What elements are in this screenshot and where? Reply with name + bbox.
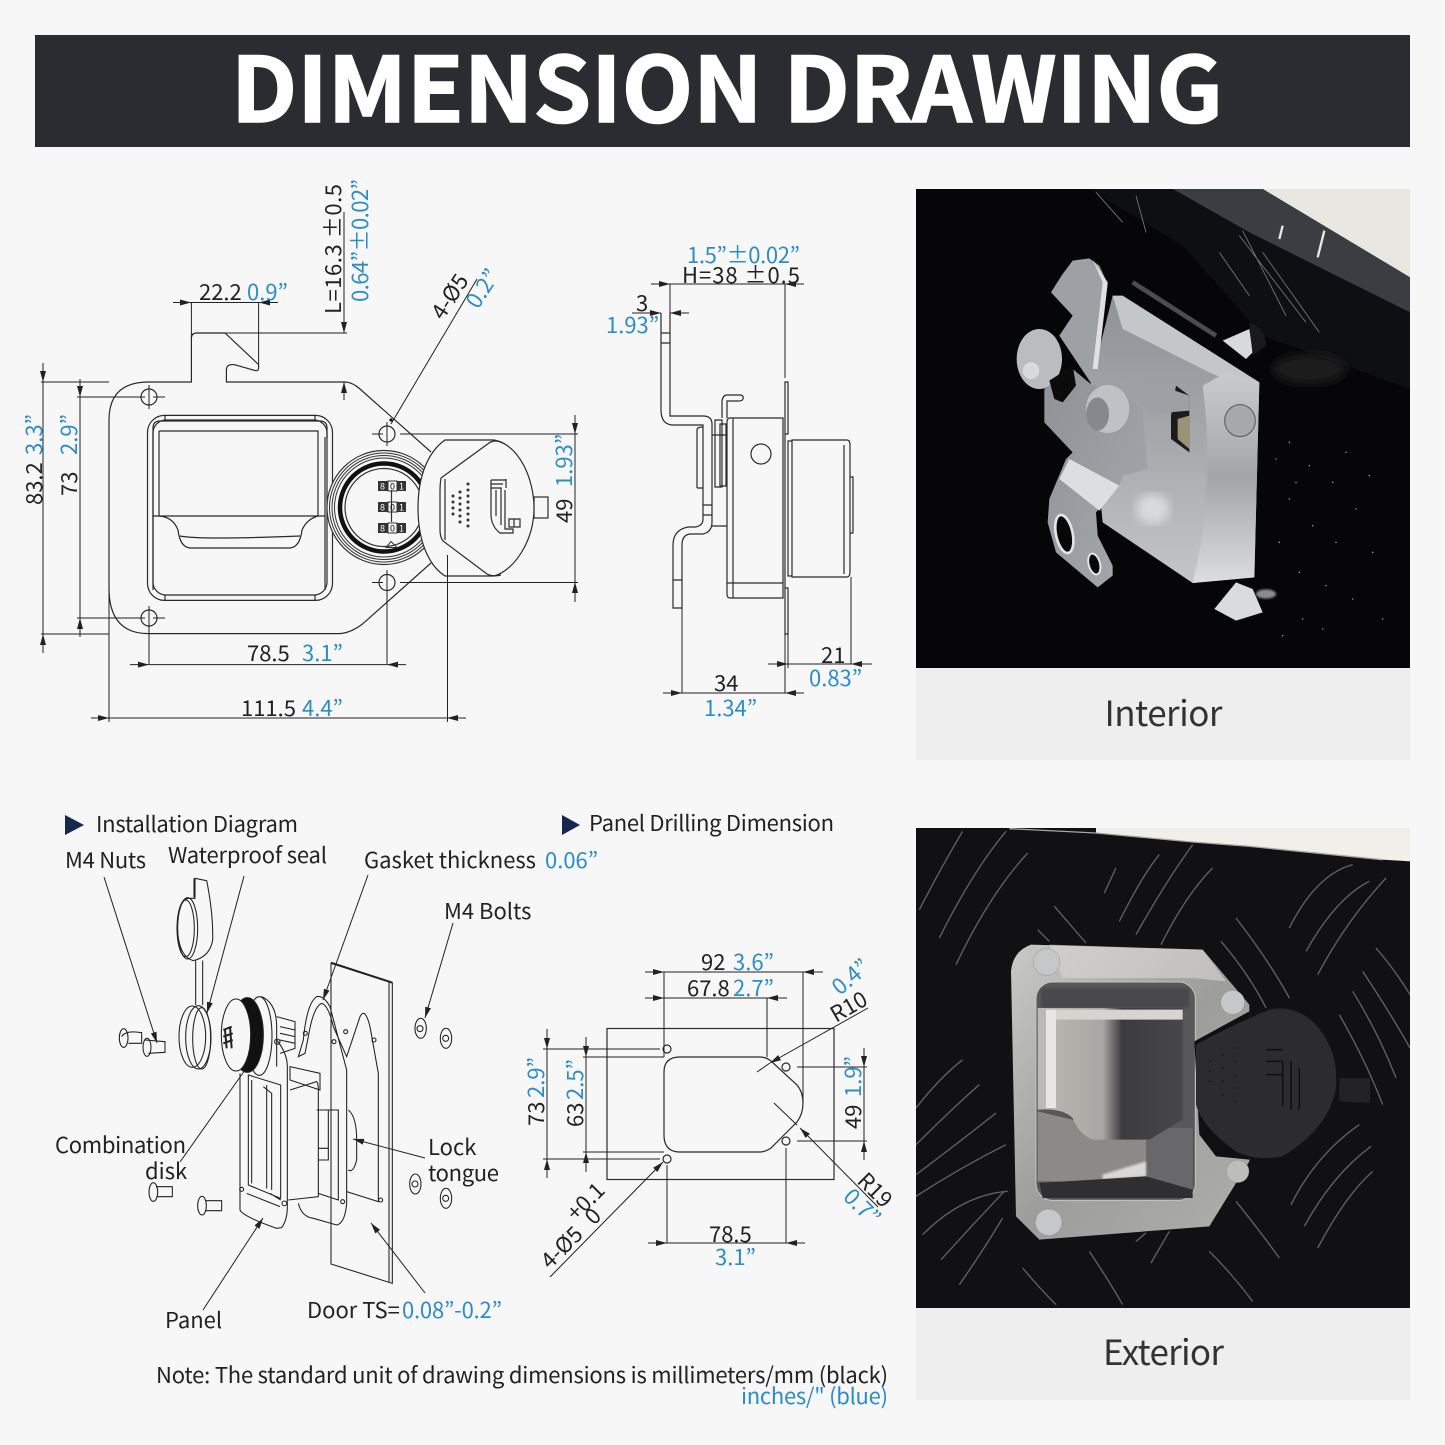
- front view dimension labels: L=16.3 ±0.5: [316, 184, 348, 314]
- exploded view drawing: [119, 878, 452, 1283]
- photo: exterior view: [916, 828, 1410, 1308]
- front view dimension labels: 3.1”: [302, 636, 343, 668]
- callout labels: Gasket thickness: [364, 843, 536, 875]
- installation diagram: [55, 807, 598, 1335]
- combination dial: [327, 450, 441, 564]
- side dimension labels: 1.5”±0.02”: [687, 238, 800, 270]
- lock side outline: [661, 313, 853, 634]
- drilling template: [607, 1028, 834, 1180]
- front view dimension labels: 0.2”: [457, 262, 506, 314]
- drilling heading: Panel Drilling Dimension: [589, 806, 834, 838]
- callout labels: Waterproof seal: [168, 838, 327, 870]
- panel drilling dimension: [519, 806, 901, 1277]
- front view technical drawing: [17, 179, 579, 723]
- drilling dimension labels: 73: [519, 1102, 551, 1126]
- leader lines: [104, 875, 453, 1310]
- exterior caption: Exterior: [1103, 1325, 1224, 1376]
- interior caption: Interior: [1104, 686, 1223, 737]
- drilling dimension labels: 1.9”: [836, 1056, 868, 1097]
- drilling dimension labels: 63: [558, 1103, 590, 1127]
- combination dial: 1: [399, 480, 404, 492]
- combination dial: 8: [380, 500, 385, 514]
- drilling dimension labels: R10: [824, 982, 873, 1029]
- note: Note: The standard unit of drawing dimensions is millimeters/mm (black): [156, 1358, 888, 1390]
- callout labels: tongue: [428, 1156, 499, 1188]
- combination dial: 0: [390, 522, 395, 534]
- front view dimension labels: 3.3”: [17, 414, 49, 455]
- front view dimension labels: 22.2: [199, 275, 242, 307]
- drilling dimension labels: 0.7”: [837, 1180, 889, 1232]
- photo: interior view: [916, 189, 1410, 669]
- drilling dimension labels: 2.9”: [519, 1057, 551, 1098]
- front view dimension labels: 78.5: [247, 636, 290, 668]
- side dimension labels: 21: [821, 638, 845, 670]
- combination dial: 0: [390, 480, 395, 492]
- title banner: DIMENSION DRAWING: [231, 18, 1223, 148]
- front view dimension labels: 83.2: [17, 462, 49, 505]
- side dimension labels: 34: [714, 666, 738, 698]
- callout labels: Lock: [428, 1130, 476, 1162]
- drilling dimension labels: 2.5”: [558, 1059, 590, 1100]
- front view dimension labels: 73: [52, 472, 84, 496]
- front view dimension labels: 2.9”: [52, 414, 84, 455]
- drilling dimension labels: 0: [576, 1200, 608, 1231]
- callout labels: [55, 838, 598, 1335]
- side dimension labels: 0.83”: [809, 661, 862, 693]
- combination dial: 8: [380, 522, 385, 534]
- drilling dimension labels: [519, 945, 901, 1275]
- drilling dimension labels: 3.6”: [733, 945, 774, 977]
- side dimension labels: 1.93”: [606, 308, 659, 340]
- callout labels: disk: [145, 1154, 187, 1186]
- side dimension labels: [606, 238, 862, 723]
- side dimension labels: 3: [636, 286, 648, 318]
- callout labels: M4 Bolts: [444, 894, 531, 926]
- side dimension lines: [632, 284, 872, 693]
- callout labels: Combination: [55, 1128, 186, 1160]
- drilling dimension labels: 67.8: [687, 971, 730, 1003]
- side dimension labels: 1.34”: [704, 691, 757, 723]
- combination dial: 0: [390, 500, 395, 514]
- callout labels: M4 Nuts: [65, 843, 146, 875]
- waterproof cap: [418, 440, 548, 576]
- lock front outline: [109, 333, 431, 634]
- interior caption: [916, 668, 1410, 760]
- note: [156, 1358, 888, 1411]
- installation heading: Installation Diagram: [96, 807, 298, 839]
- front view dimension labels: 4.4”: [302, 691, 343, 723]
- side dimension labels: H=38 ±0.5: [682, 258, 800, 290]
- front view dimension labels: 0.64”±0.02”: [343, 179, 375, 302]
- front view dimension labels: 0.9”: [247, 275, 288, 307]
- drilling dimension labels: 4-Ø5: [532, 1218, 589, 1275]
- combination dial: 8: [380, 480, 385, 492]
- combination dial: 1: [399, 500, 404, 514]
- drilling dimension lines: [543, 972, 878, 1277]
- combination dial: 1: [399, 522, 404, 534]
- exterior caption: [916, 1308, 1410, 1400]
- drilling dimension labels: R19: [851, 1164, 901, 1214]
- drilling dimension labels: +0.1: [558, 1174, 611, 1227]
- front view dimension labels: 49: [547, 499, 579, 523]
- drilling dimension labels: 2.7”: [733, 971, 774, 1003]
- drilling dimension labels: 49: [836, 1105, 868, 1129]
- callout labels: Panel: [165, 1303, 222, 1335]
- front view dimension labels: 111.5: [241, 691, 296, 723]
- drilling dimension labels: 92: [701, 945, 725, 977]
- callout labels: 0.06”: [545, 843, 598, 875]
- note: inches/" (blue): [741, 1379, 888, 1411]
- callout labels: Door TS=: [307, 1293, 400, 1325]
- callout labels: 0.08”-0.2”: [402, 1293, 502, 1325]
- front view dimension labels: [17, 179, 579, 723]
- drilling dimension labels: 3.1”: [715, 1240, 756, 1272]
- front view dimension labels: 4-Ø5: [422, 267, 475, 325]
- side view technical drawing: [606, 238, 872, 723]
- dimension lines: [41, 212, 578, 722]
- drilling dimension labels: 78.5: [709, 1217, 752, 1249]
- drilling dimension labels: 0.4”: [824, 951, 876, 1001]
- front view dimension labels: 1.93”: [547, 434, 579, 487]
